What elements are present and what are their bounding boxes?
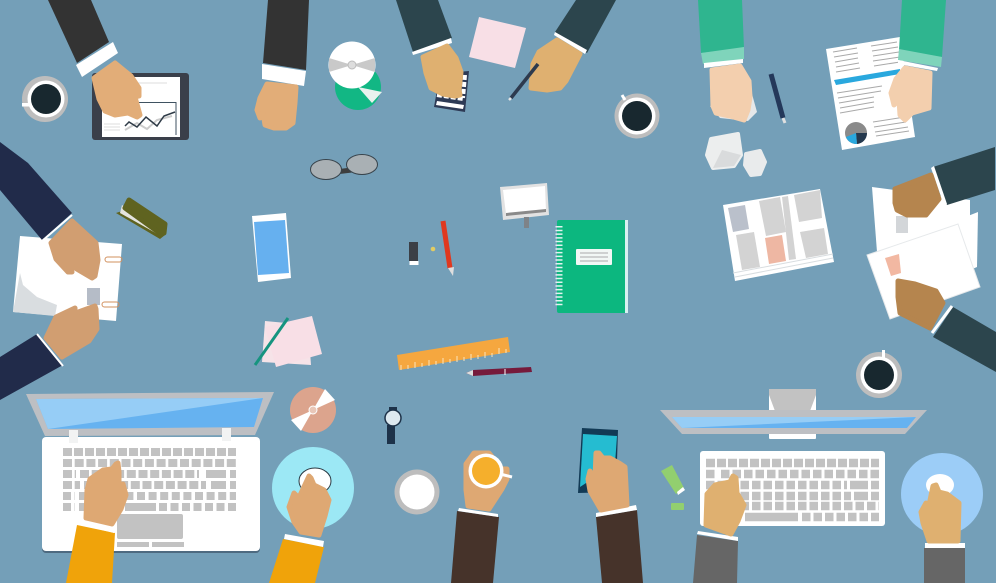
white plate: [394, 470, 440, 514]
desktop keyboard: [700, 451, 885, 526]
crumpled paper balls: [707, 134, 765, 175]
tablet with line chart: [92, 73, 189, 140]
yellow pushpin: [431, 247, 435, 251]
newspaper: [723, 189, 834, 281]
crumpled paper in hand: [710, 94, 757, 121]
glasses: [310, 154, 378, 180]
upper right hand: [895, 147, 995, 215]
laptop: [26, 392, 274, 553]
orange ruler: [397, 337, 510, 370]
report document with pie chart: [826, 37, 915, 150]
hand on calculator: [396, 0, 461, 96]
coffee cup right: [856, 350, 902, 398]
hand on document: [891, 0, 946, 120]
desktop monitor: [660, 389, 927, 439]
hand with orange cup: [451, 453, 512, 583]
hand holding pen: [531, 0, 616, 90]
red pencil: [443, 221, 454, 276]
hand on mouse: [269, 476, 329, 583]
dark phone: [578, 428, 618, 493]
hand on phone: [588, 453, 643, 583]
hand on desktop mouse: [921, 485, 965, 583]
hand pointing at tablet: [48, 0, 140, 117]
stapled sheet with paper clips: [13, 236, 122, 321]
USB stick and cap: [661, 465, 685, 510]
CD on table: [290, 387, 336, 433]
white phone: [252, 213, 291, 282]
mouse pad with mouse: [272, 447, 354, 529]
hand typing on keyboard: [693, 476, 744, 583]
upper left hand: [0, 142, 98, 278]
hand typing on laptop: [66, 463, 126, 583]
lower left hand: [0, 306, 97, 400]
eraser: [409, 242, 418, 265]
blue mouse pad with mouse: [901, 453, 983, 535]
coffee cup top left: [22, 76, 68, 122]
green notebook: [557, 220, 628, 313]
lower right hand: [898, 281, 996, 372]
calculator: [434, 71, 469, 112]
stack of loose papers right: [867, 187, 980, 319]
maroon pen: [466, 367, 532, 376]
hand top centre left: [257, 0, 309, 128]
pink notes with green pen: [255, 316, 322, 367]
blue pen: [771, 74, 785, 123]
pink note: [469, 17, 526, 68]
coffee cup top centre: [614, 94, 660, 138]
ID badge: [500, 183, 549, 228]
hand with green sleeve left: [698, 0, 750, 120]
wristwatch: [385, 407, 401, 444]
stapler: [116, 200, 165, 239]
compact discs: [328, 42, 382, 110]
pen in hand: [509, 64, 538, 100]
